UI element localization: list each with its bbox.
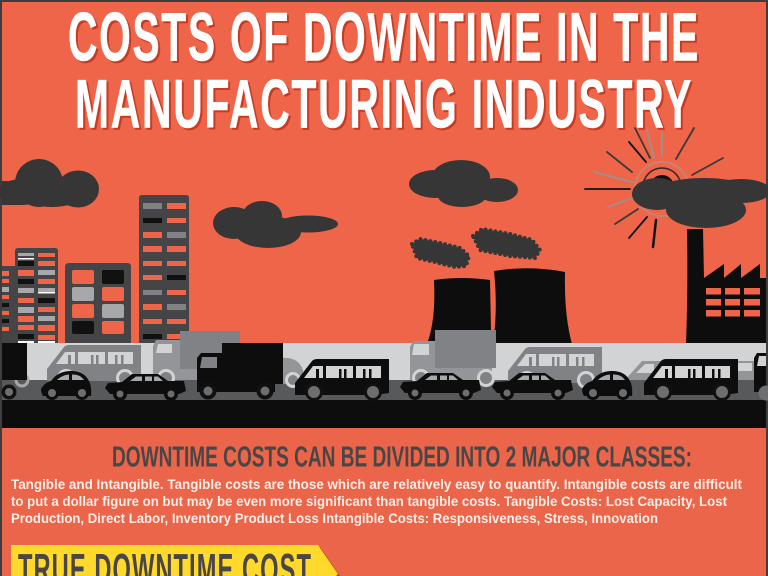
road <box>2 343 766 428</box>
cooling towers <box>427 268 572 344</box>
building: far left <box>2 266 16 344</box>
cloud: centre left <box>213 201 338 248</box>
factory <box>686 229 766 344</box>
grey van 3 <box>625 361 755 380</box>
smoke: left plume <box>412 239 469 267</box>
grey truck 1 <box>153 331 240 387</box>
grey truck 2 <box>410 330 496 387</box>
smoke: right plume <box>473 229 540 258</box>
cloud: centre right <box>409 160 518 207</box>
building: striped <box>15 248 58 344</box>
grey van 1 <box>47 345 141 387</box>
banner: true downtime cost <box>11 545 340 576</box>
title <box>68 0 700 142</box>
skyline scene <box>0 128 768 428</box>
sedan 2 <box>400 373 481 400</box>
intro paragraph <box>11 477 742 526</box>
lower background <box>0 428 768 576</box>
black truck left edge <box>2 343 28 400</box>
building: mid windows <box>65 263 131 344</box>
small car 2 <box>582 371 632 400</box>
black van 2 <box>644 359 738 401</box>
grey car behind <box>280 358 303 388</box>
intro paragraph: to put a dollar figure on but may be even more significant than tangible costs. Tangible Costs: Lost Capacity, Lost <box>11 494 727 509</box>
sun <box>585 128 723 247</box>
intro paragraph: Tangible and Intangible. Tangible costs are those which are relatively easy to quantify. Intangible costs are difficult <box>11 477 742 492</box>
cloud: over sun <box>632 178 768 228</box>
black van 1 <box>295 359 389 401</box>
building: tall <box>139 195 189 344</box>
black truck <box>197 343 283 400</box>
black truck right edge <box>754 353 768 400</box>
intro paragraph: Production, Direct Labor, Inventory Product Loss Intangible Costs: Responsiveness, Stress, Innovation <box>11 511 658 526</box>
sedan 3 <box>492 373 573 400</box>
small car 1 <box>41 371 91 400</box>
cloud: top left <box>0 159 99 208</box>
grey van 2 <box>508 347 602 389</box>
sedan 1 <box>105 374 186 401</box>
